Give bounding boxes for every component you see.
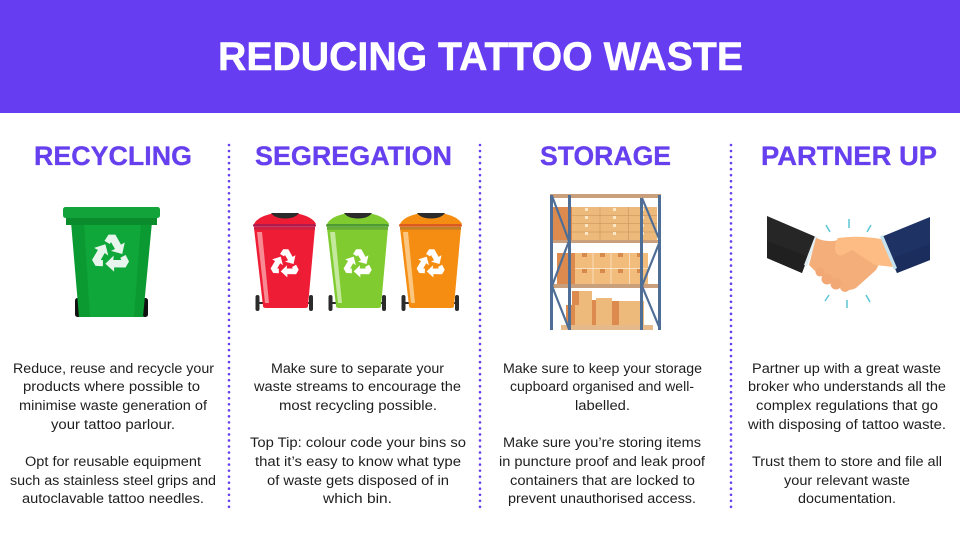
icon: red bin bbox=[253, 213, 316, 311]
text: recycling: Reduce, reuse and recycle your bbox=[13, 361, 215, 376]
top shelf boxes bbox=[553, 207, 572, 240]
text: segregation: waste streams to encourage the bbox=[253, 379, 461, 394]
text: partner up: complex regulations that go bbox=[756, 398, 938, 413]
text: recycling: products where possible to bbox=[23, 379, 200, 394]
text: storage: in puncture proof and leak proof bbox=[499, 454, 705, 469]
text: partner up: Trust them to store and file all bbox=[752, 454, 942, 469]
panel: storage bbox=[499, 141, 705, 506]
text: storage: containers that are locked to bbox=[510, 473, 695, 488]
text: storage: cupboard organised and well- bbox=[510, 379, 694, 394]
icon: orange bin bbox=[399, 213, 462, 311]
text: storage bbox=[499, 361, 705, 506]
heading: storage: STORAGE bbox=[540, 141, 671, 171]
panel: partner up bbox=[747, 141, 946, 506]
rack beams and posts bbox=[550, 194, 661, 288]
heading: recycling: RECYCLING bbox=[34, 141, 192, 171]
icon: handshake bbox=[767, 216, 930, 308]
text: recycling: Opt for reusable equipment bbox=[25, 454, 201, 469]
header banner bbox=[0, 0, 960, 113]
text: partner up: Partner up with a great waste bbox=[752, 361, 941, 376]
title: REDUCING TATTOO WASTE bbox=[218, 35, 743, 79]
text: segregation: that it’s easy to know what type bbox=[255, 454, 461, 469]
panel: segregation bbox=[250, 141, 466, 506]
text: partner up: broker who understands all the bbox=[748, 379, 946, 394]
text: storage: Make sure to keep your storage bbox=[503, 361, 702, 376]
text: segregation: Make sure to separate your bbox=[271, 361, 445, 376]
panel: recycling bbox=[10, 141, 216, 506]
text: partner up bbox=[747, 361, 946, 506]
bottom shelf boxes bbox=[572, 291, 580, 305]
text: segregation: which bin. bbox=[322, 491, 392, 506]
middle shelf boxes bbox=[557, 253, 575, 284]
text: partner up: with disposing of tattoo waste. bbox=[747, 417, 946, 432]
sparkle rays bbox=[825, 219, 871, 308]
text: recycling: autoclavable tattoo needles. bbox=[22, 491, 204, 506]
text: partner up: your relevant waste bbox=[784, 473, 910, 488]
text: recycling: such as stainless steel grips and bbox=[10, 473, 216, 488]
heading: segregation: SEGREGATION bbox=[255, 141, 452, 171]
icon: green wheelie bin bbox=[63, 207, 160, 317]
text: recycling: minimise waste generation of bbox=[19, 398, 207, 413]
column dividers bbox=[229, 145, 731, 507]
text: segregation: of waste gets disposed of in bbox=[267, 473, 449, 488]
text: recycling: your tattoo parlour. bbox=[51, 417, 175, 432]
heading: partner up: PARTNER UP bbox=[761, 141, 937, 171]
icon: green bin bbox=[326, 213, 389, 311]
icon: warehouse shelves bbox=[550, 194, 661, 330]
text: storage: labelled. bbox=[575, 398, 630, 413]
text: segregation bbox=[250, 361, 466, 506]
text: partner up: documentation. bbox=[798, 491, 896, 506]
text: recycling bbox=[10, 361, 216, 506]
text: segregation: most recycling possible. bbox=[279, 398, 437, 413]
text: segregation: Top Tip: colour code your bins so bbox=[250, 435, 466, 450]
pallet bbox=[561, 325, 653, 330]
text: storage: prevent unauthorised access. bbox=[508, 491, 696, 506]
text: storage: Make sure you’re storing items bbox=[503, 435, 701, 450]
